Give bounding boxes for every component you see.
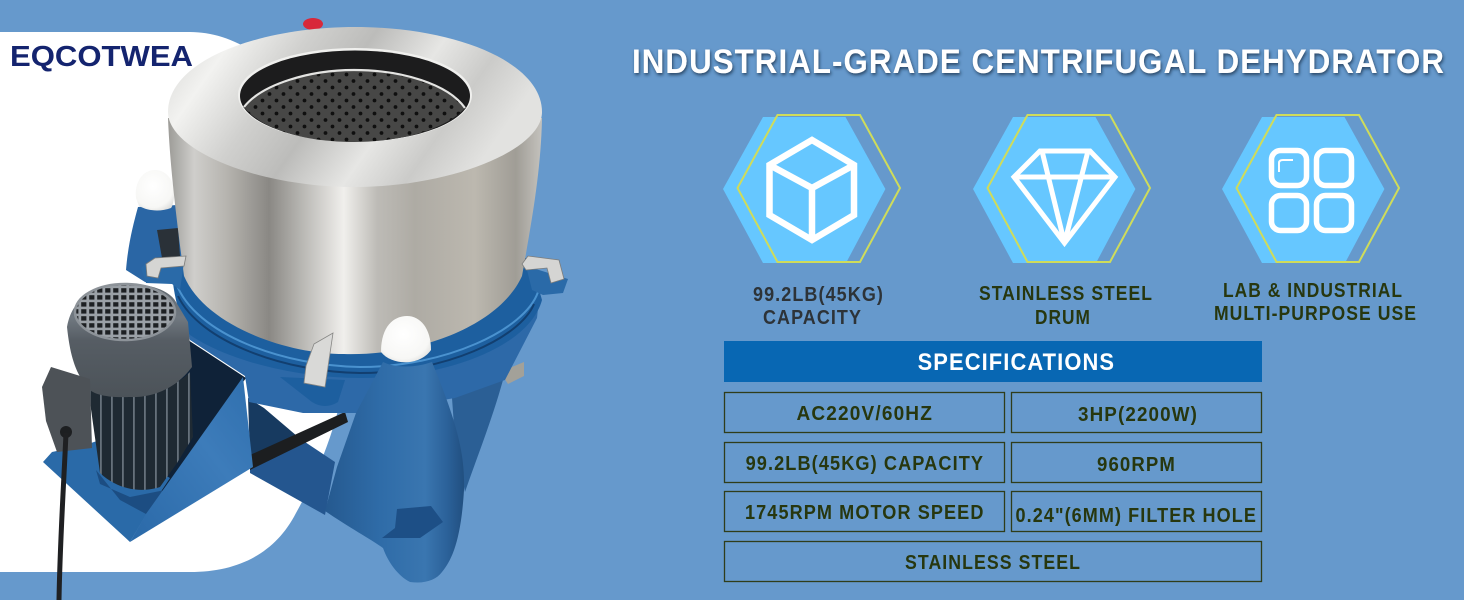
feature: capacity [723,115,900,329]
label: LAB & INDUSTRIAL [1223,280,1403,302]
spec: filter hole [1012,492,1262,532]
spec: material [724,542,1262,582]
label: 99.2LB(45KG) [753,284,884,306]
clamp left [141,256,186,290]
front foot cone [325,316,464,583]
icon: cube [770,140,854,240]
label: MULTI-PURPOSE USE [1214,303,1417,325]
lower beam [250,442,335,515]
blue flange ring [171,258,542,406]
red knob [303,18,323,30]
feature: multi-purpose use [1214,115,1417,325]
motor foot [96,470,165,514]
spec: power [1012,392,1262,432]
power cable [59,433,66,600]
back left foot [126,170,190,282]
motor base plate [43,440,170,542]
hexagon fill [723,117,885,263]
label: DRUM [1035,307,1091,329]
label: CAPACITY [763,307,862,329]
junction box [42,367,92,452]
label [979,283,1153,329]
spec: rotation speed: 960RPM [1097,454,1176,476]
dark beam [248,398,304,460]
specifications header: SPECIFICATIONS [918,349,1115,376]
drum top face [168,27,542,187]
bowl under the drum [175,290,540,413]
clamp front [304,333,333,387]
specifications header [724,341,1262,382]
hexagon fill [973,117,1135,263]
dark frame behind motor [150,340,246,496]
hexagon outline [738,115,900,262]
feature: stainless steel drum [973,115,1153,329]
product photo: centrifugal dehydrator [42,18,568,600]
spec: capacity: 99.2LB(45KG) CAPACITY [746,453,984,475]
clamp right [522,256,568,295]
hexagon fill [1222,117,1384,263]
white curved backdrop [0,32,352,572]
motor [67,284,193,490]
label [753,284,884,329]
spec: motor speed [724,492,1004,532]
spec: rotation speed [1012,442,1262,482]
black cross bar [250,412,348,470]
spec: voltage: AC220V/60HZ [796,403,933,425]
icon: diamond [1014,151,1115,243]
hexagon outline [988,115,1150,262]
stainless drum body [168,118,542,354]
label: STAINLESS STEEL [979,283,1153,305]
icon: four squares [1272,150,1352,230]
spec: filter hole: 0.24"(6MM) FILTER HOLE [1016,505,1257,527]
triangular plate [130,377,253,542]
spec: capacity [724,442,1004,482]
specifications table [724,392,1262,582]
spec: power: 3HP(2200W) [1078,404,1198,426]
spec: material: STAINLESS STEEL [905,552,1081,574]
drum opening [238,48,472,142]
spec: voltage [724,392,1004,432]
hexagon outline [1236,115,1399,262]
spec: motor speed: 1745RPM MOTOR SPEED [745,502,984,524]
back right leg [452,362,524,492]
label [1214,280,1417,325]
brand logo: EQCOTWEA [10,41,193,73]
